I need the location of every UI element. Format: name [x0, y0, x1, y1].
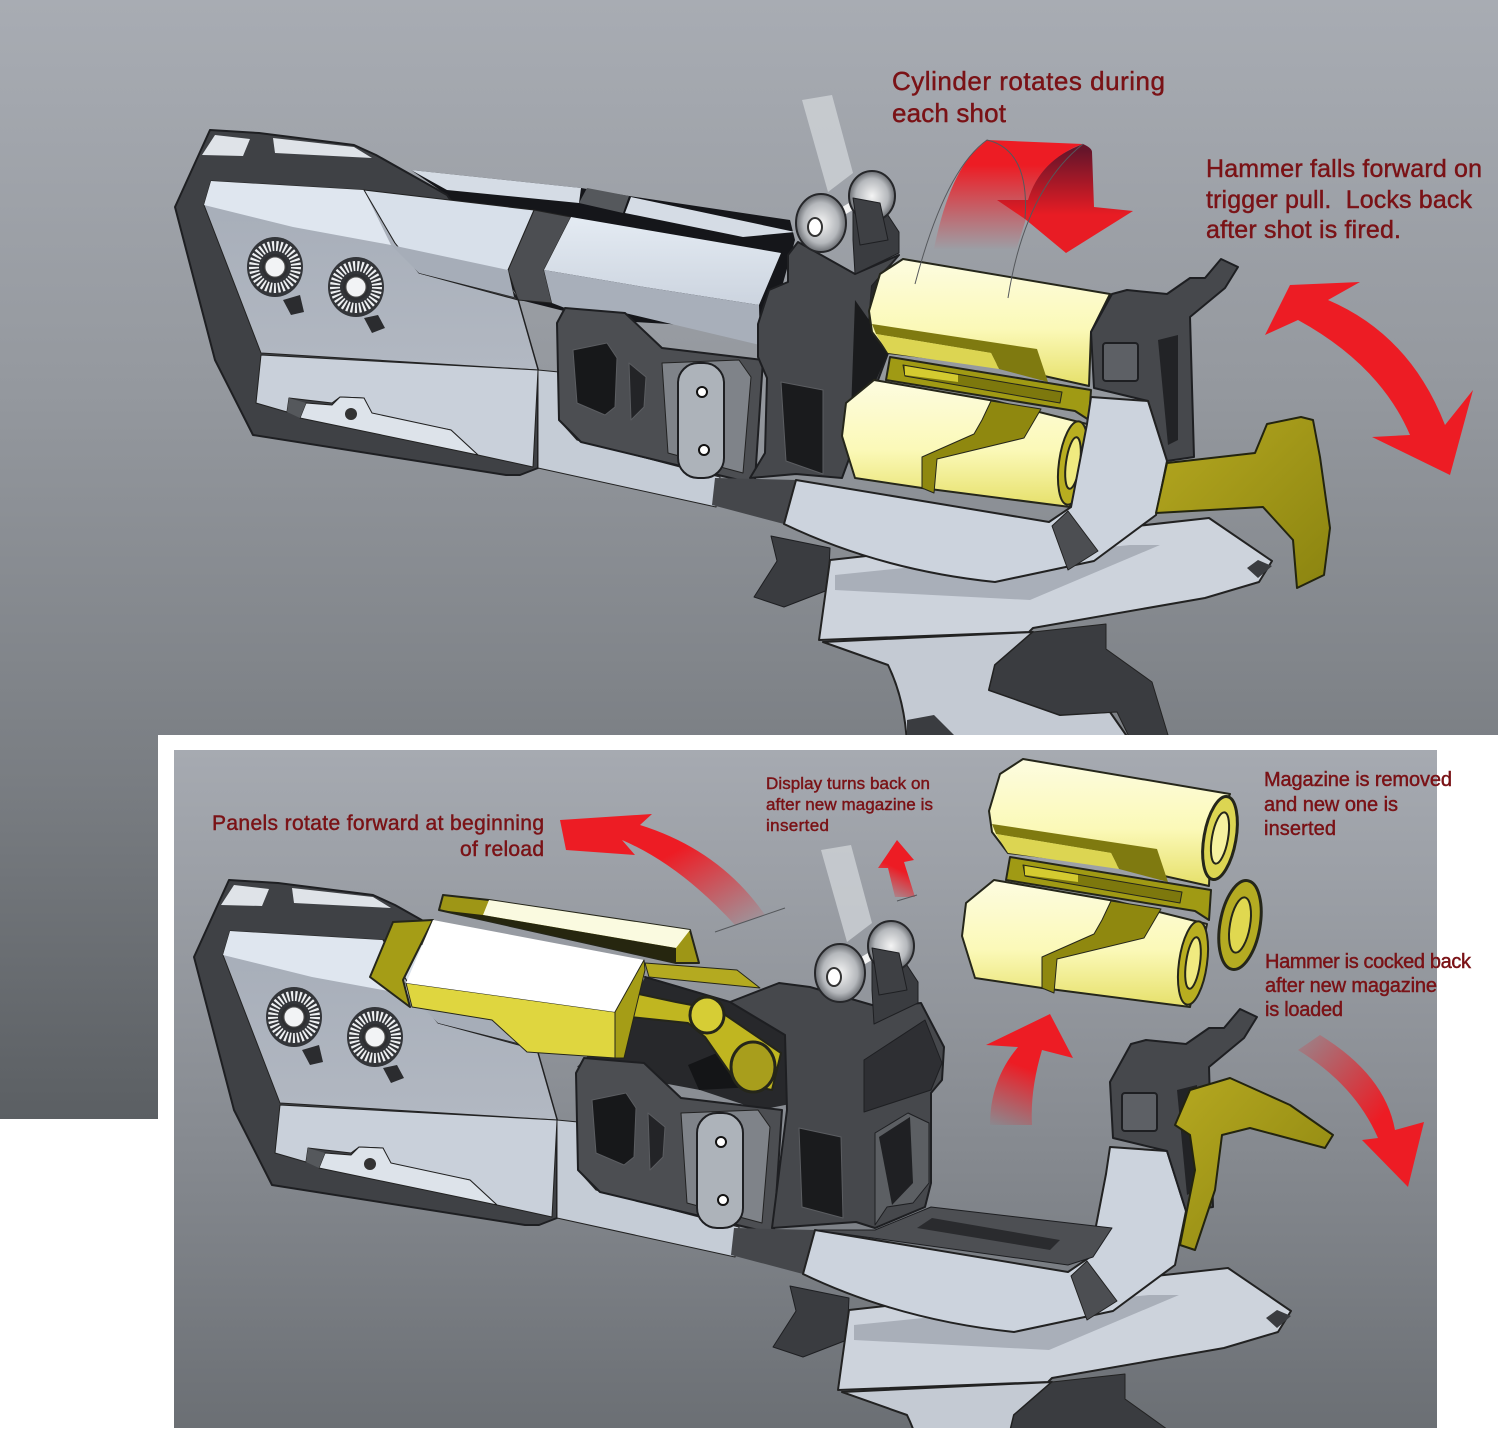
- arrow: panels rotate: [560, 814, 785, 932]
- floating magazine: [962, 759, 1268, 1007]
- gun: top view, firing sequence: [175, 95, 1330, 745]
- callout: display turns on: Display turns back on: [766, 774, 930, 793]
- callout: hammer falls: after shot is fired.: [1206, 216, 1401, 244]
- callout: hammer falls: trigger pull. Locks back: [1206, 186, 1472, 214]
- background: top panel: [0, 0, 1498, 1119]
- callout: display turns on: after new magazine is: [766, 795, 933, 814]
- grip and wing: [754, 518, 1272, 745]
- bridge: [886, 357, 1091, 420]
- main plate: [204, 181, 538, 370]
- cocked hammer: [1175, 1078, 1333, 1250]
- front curve bottom: [731, 1147, 1186, 1332]
- callout: magazine removed: and new one is: [1264, 794, 1398, 816]
- magazine well floor: [815, 1207, 1112, 1265]
- panel: front rotated: [370, 920, 645, 1058]
- receiver block: [750, 242, 899, 478]
- upper strips and top plates: [411, 170, 795, 345]
- arrow: hammer falls: [1265, 282, 1473, 475]
- grip bottom: [772, 1267, 1292, 1428]
- rifle body: [175, 130, 720, 507]
- lower plate: [256, 355, 538, 467]
- arrow: hammer cocked: [1298, 1035, 1424, 1187]
- arrow: display turns on: [878, 840, 917, 901]
- lower chamber: [842, 380, 1087, 507]
- callout: cylinder rotates: Cylinder rotates during: [892, 66, 1165, 96]
- white frame behind bottom panel: [158, 735, 1500, 1451]
- callout: magazine removed: Magazine is removed: [1264, 769, 1452, 791]
- side mechanism panel: [557, 308, 763, 480]
- callout: cylinder rotates: each shot: [892, 98, 1007, 128]
- gun: bottom view, reload sequence: [194, 759, 1333, 1451]
- rear block bottom: [1110, 1009, 1257, 1211]
- callout: hammer cocked: is loaded: [1265, 999, 1343, 1021]
- front curve: [712, 397, 1167, 582]
- upper chamber: [869, 259, 1110, 386]
- side panel bottom: [576, 1058, 782, 1230]
- front plate: [364, 190, 534, 297]
- receiver bottom: [645, 977, 944, 1228]
- callout: hammer cocked: Hammer is cocked back: [1265, 951, 1472, 973]
- panel: rear rotated: [439, 895, 699, 963]
- body bottom: [194, 880, 739, 1257]
- rear block: [1091, 259, 1238, 461]
- linkage: [630, 963, 781, 1092]
- callout: panels rotate: Panels rotate forward at beginning: [212, 812, 544, 835]
- magazine chambers: [842, 259, 1110, 507]
- callout: magazine removed: inserted: [1264, 818, 1336, 840]
- arrow: cylinder rotates: [915, 140, 1133, 298]
- rear sight and display: [796, 95, 899, 274]
- dials: [247, 237, 385, 333]
- silver band: [538, 370, 720, 507]
- internal dark cavity: [577, 978, 786, 1108]
- callout: panels rotate: of reload: [460, 838, 544, 861]
- arrow: magazine inserted: [986, 1014, 1073, 1125]
- lever: [300, 397, 478, 455]
- hammer: [1156, 417, 1330, 588]
- callout: hammer cocked: after new magazine: [1265, 975, 1437, 997]
- callout: display turns on: inserted: [766, 816, 829, 835]
- vent behind link: [688, 1054, 738, 1090]
- sight bottom: [815, 845, 918, 1024]
- background: bottom panel: [174, 750, 1437, 1428]
- callout: hammer falls: Hammer falls forward on: [1206, 155, 1482, 183]
